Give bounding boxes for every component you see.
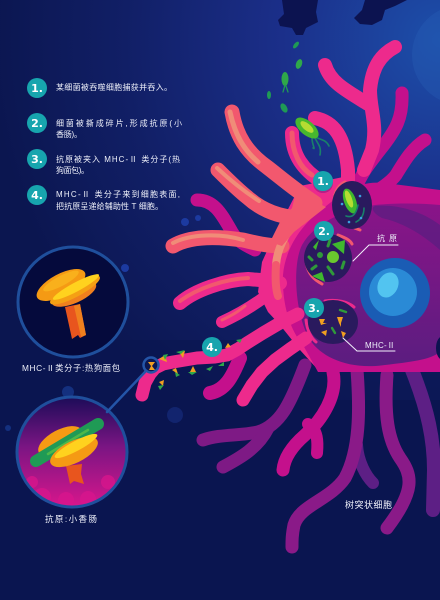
step 4: 4.	[31, 189, 43, 202]
callout: MHC-II: MHC-Ⅱ	[365, 341, 395, 350]
callout: antigen	[353, 233, 398, 261]
step badges on diagram: 4.	[206, 341, 218, 354]
short magenta arm	[210, 358, 240, 393]
coral arms	[173, 112, 315, 322]
navy pocket at right edge	[436, 336, 440, 360]
step badges on diagram: 1.	[317, 175, 329, 188]
callout: MHC-II	[343, 338, 395, 351]
magenta cell body	[283, 183, 440, 372]
antigens on arm	[158, 339, 242, 390]
label: dendritic cell: 树突状细胞	[345, 499, 392, 510]
step 3: 狗面包)。	[56, 165, 89, 175]
MHC-II close-up circle	[18, 247, 128, 357]
connector and zoom marker	[107, 358, 158, 412]
purple lower arms	[203, 365, 434, 547]
nucleus	[360, 258, 430, 328]
step 3	[27, 149, 180, 175]
label: antigen: 抗原:小香肠	[45, 514, 97, 524]
step badges on diagram	[202, 171, 334, 357]
coral junction	[270, 192, 326, 246]
purple inner cell zone	[296, 204, 440, 366]
magenta upper arms	[197, 93, 425, 250]
small bacteria trail	[267, 41, 304, 114]
label: MHC-II molecule: MHC-Ⅱ类分子:热狗面包	[22, 363, 120, 373]
step 4: MHC-Ⅱ 类分子来到细胞表面,	[56, 189, 180, 199]
step badges on diagram: 2.	[318, 225, 330, 238]
free bacterium	[292, 114, 329, 155]
vacuole 2: fragments	[304, 234, 352, 284]
step 3: 3.	[31, 153, 43, 166]
step 2: 细菌被撕成碎片,形成抗原(小	[56, 118, 182, 128]
antigen close-up circle	[17, 397, 127, 508]
step 1	[27, 78, 172, 98]
vacuole 1: engulfed bacterium	[332, 181, 372, 230]
step 4	[27, 185, 180, 211]
dark upper band of inner zone	[373, 206, 440, 250]
dark cells at top	[278, 0, 407, 35]
step 2: 2.	[31, 117, 43, 130]
step 3: 抗原被夹入 MHC-Ⅱ 类分子(热	[56, 154, 180, 164]
step 1: 1.	[31, 82, 43, 95]
step 1: 某细菌被吞噬细胞捕获并吞入。	[56, 82, 172, 92]
step 4: 把抗原呈递给辅助性 T 细胞。	[56, 201, 163, 211]
step 2: 香肠)。	[56, 129, 82, 139]
long arm	[142, 314, 298, 395]
second pink arm	[243, 338, 306, 400]
callout: antigen: 抗 原	[377, 233, 397, 243]
step 2	[27, 113, 182, 139]
vacuole 3: MHC-II in vesicle	[306, 300, 358, 344]
step badges on diagram: 3.	[308, 302, 320, 315]
dendritic cell	[173, 47, 440, 547]
pink cell body	[258, 176, 360, 372]
pink upper arms	[292, 47, 395, 190]
